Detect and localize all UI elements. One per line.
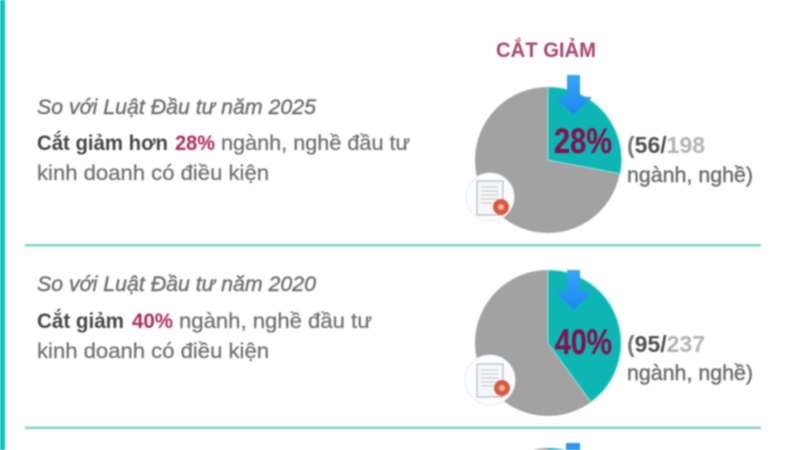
- text block: 2020 description: [37, 308, 372, 363]
- icon: down arrow: [566, 443, 580, 450]
- label: 56/198: (56/198: [627, 132, 705, 158]
- pie chart: 40%: [475, 270, 621, 416]
- text block: 2020 description: kinh doanh có điều kiện: [37, 339, 269, 363]
- label: ngành, nghề: ngành, nghề): [627, 163, 753, 187]
- icon: down arrow: [555, 75, 592, 115]
- icon: down arrow: [555, 270, 592, 310]
- label: 95/237: (95/237: [627, 331, 705, 357]
- icon: document with red mark: [465, 355, 515, 405]
- icon: document with red mark: [466, 173, 514, 221]
- text block: 2025 description: ngành, nghề đầu tư: [221, 131, 410, 155]
- text block: 2025 description: [37, 130, 410, 185]
- text block: 2025 description: 28%: [175, 131, 215, 155]
- percentage: 40%: 40%: [555, 323, 612, 362]
- heading: cắt giảm: CẮT GIẢM: [496, 37, 596, 62]
- text block: 2020 description: ngành, nghề đầu tư: [179, 309, 372, 333]
- label: ngành, nghề: ngành, nghề): [627, 361, 753, 385]
- text block: 2020 subtitle: So với Luật Đầu tư năm 2020: [37, 272, 316, 296]
- percentage: 28%: 28%: [554, 122, 612, 161]
- text block: 2020 description: Cắt giảm: [37, 308, 124, 333]
- pie chart: 28%: [475, 75, 622, 233]
- text block: 2025 description: Cắt giảm hơn: [37, 130, 168, 155]
- panel: comparison with 2025 law: [37, 75, 753, 233]
- pie chart: third row, cut off at bottom: [533, 443, 580, 450]
- text block: 2025 description: kinh doanh có điều kiện: [37, 161, 269, 185]
- text block: 2025 subtitle: So với Luật Đầu tư năm 2025: [37, 95, 317, 119]
- panel: comparison with 2020 law: [37, 270, 753, 416]
- text block: 2020 description: 40%: [132, 309, 173, 333]
